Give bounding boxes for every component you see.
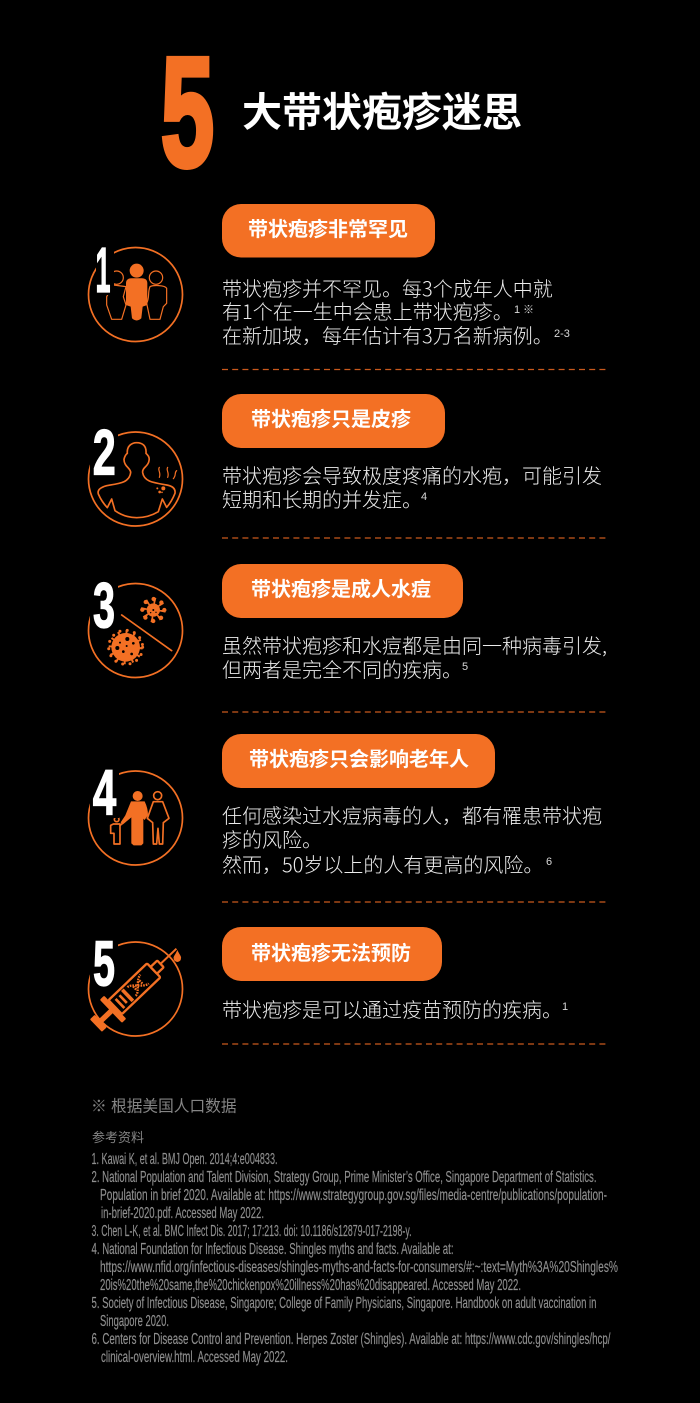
icon: body with rash: [88, 416, 182, 526]
pill heading: [222, 734, 495, 788]
text block: 6: [546, 856, 552, 868]
panel: myth 1: [88, 204, 570, 349]
references: Singapore 2020.: [100, 1313, 169, 1330]
text block: 5: [462, 661, 468, 673]
references: in-brief-2020.pdf. Accessed May 2022.: [101, 1205, 264, 1222]
icon: three people: [88, 234, 182, 342]
text block: 在新加坡，每年估计有3万名新病例。: [222, 320, 553, 349]
text block: 短期和长期的并发症。: [222, 484, 422, 513]
panel: myth 2: [88, 394, 602, 526]
text block: 2-3: [554, 328, 570, 340]
icon: three people: 1: [96, 234, 110, 306]
text block: 带状疱疹会导致极度疼痛的水疱，可能引发: [222, 460, 602, 489]
icon: vaccine syringe: [85, 928, 187, 1037]
text block: [222, 460, 602, 513]
references: clinical-overview.html. Accessed May 2022.: [101, 1349, 288, 1366]
title: 大带状疱疹迷思: [242, 91, 522, 135]
text block: [222, 630, 607, 683]
pill heading: 带状疱疹是成人水痘: [251, 577, 431, 601]
panel: myth 3: [88, 564, 607, 683]
references: 4. National Foundation for Infectious Disease. Shingles myths and facts. Available at:: [92, 1241, 454, 1258]
pill heading: [222, 204, 435, 258]
icon: family of three: [88, 756, 182, 865]
text block: 1: [562, 1001, 568, 1013]
text block: 1: [514, 304, 520, 316]
pill heading: [222, 564, 463, 618]
references: 参考资料: [92, 1130, 144, 1145]
text block: 但两者是完全不同的疾病。: [222, 654, 462, 683]
text block: 带状疱疹并不罕见。每3个成年人中就: [222, 273, 553, 302]
references: 3. Chen L-K, et al. BMC Infect Dis. 2017; 17:213. doi: 10.1186/s12879-017-2198-y.: [92, 1223, 412, 1240]
panel: myth 5: [85, 927, 568, 1037]
pill heading: 带状疱疹只会影响老年人: [249, 747, 469, 771]
title: 5: [161, 26, 214, 198]
text block: [222, 273, 570, 349]
text block: [222, 800, 602, 878]
references: [92, 1130, 618, 1366]
title: [161, 26, 522, 198]
pill heading: [222, 927, 442, 981]
pill heading: 带状疱疹只是皮疹: [251, 407, 411, 431]
icon: family of three: 4: [93, 756, 117, 828]
panel: myth 4: [88, 734, 602, 878]
footnote: ※ 根据美国人口数据: [91, 1098, 237, 1116]
text block: 然而，50岁以上的人有更高的风险。: [222, 849, 543, 878]
text block: 虽然带状疱疹和水痘都是由同一种病毒引发,: [222, 630, 607, 659]
icon: body with rash: 2: [93, 416, 116, 488]
pill heading: 带状疱疹无法预防: [251, 941, 411, 965]
text block: ※: [523, 304, 534, 316]
text block: 任何感染过水痘病毒的人，都有罹患带状疱: [222, 800, 602, 829]
text block: 有1个在一生中会患上带状疱疹。: [222, 296, 513, 325]
text block: 带状疱疹是可以通过疫苗预防的疾病。: [222, 994, 562, 1023]
text block: 疹的风险。: [222, 824, 322, 853]
references: 1. Kawai K, et al. BMJ Open. 2014;4:e004833.: [92, 1151, 278, 1168]
pill heading: 带状疱疹非常罕见: [248, 217, 408, 241]
icon: two viruses: 3: [93, 570, 115, 642]
icon: vaccine syringe: 5: [93, 928, 115, 1000]
icon: two viruses: [88, 570, 182, 678]
text block: 4: [421, 491, 427, 503]
pill heading: [222, 394, 445, 448]
